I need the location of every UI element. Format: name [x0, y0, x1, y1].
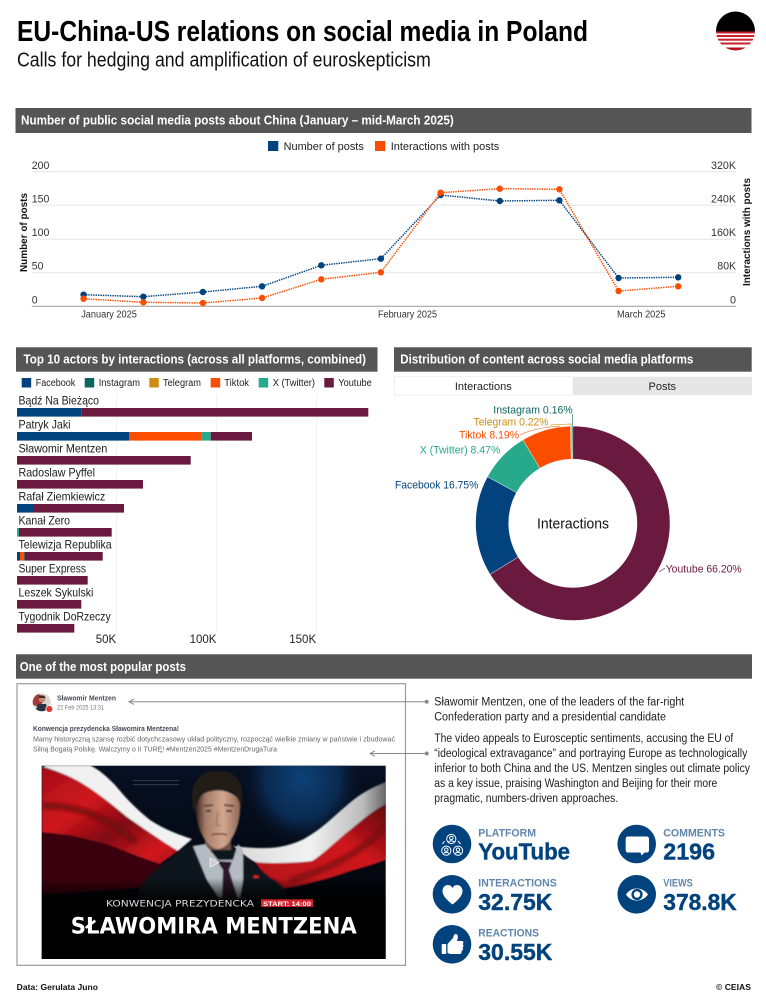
slice labels: Telegram 0.22% [474, 417, 549, 429]
heading: top 10 actors [16, 347, 378, 372]
left axis ticks: 150 [32, 194, 49, 206]
left axis title: Number of posts [18, 193, 30, 272]
stat: views: VIEWS [663, 877, 693, 889]
chart legend: Interactions with posts [391, 141, 500, 153]
avatar [31, 693, 53, 712]
right axis ticks: 240K [711, 194, 737, 206]
annotation: video: The video appeals to Eurosceptic sentiments, accusing the EU of [434, 733, 734, 745]
left axis ticks: 0 [32, 295, 38, 307]
stat: platform [433, 825, 570, 864]
heading: top 10 actors: Top 10 actors by interactions (across all platforms, combined) [24, 352, 366, 366]
annotation: video: as a key issue, praising Washington and Beijing for their more [434, 778, 717, 790]
row: Telewizja Republika: Telewizja Republika [18, 537, 112, 551]
stat: platform: PLATFORM [478, 828, 536, 840]
row: Radoslaw Pyffel [17, 465, 143, 489]
row: Patryk Jaki [17, 417, 252, 441]
icon: speech bubble [617, 825, 656, 863]
right axis ticks [711, 160, 737, 307]
series: interactions with posts [80, 186, 681, 306]
row: Radoslaw Pyffel: Radoslaw Pyffel [18, 465, 95, 479]
stat: interactions: INTERACTIONS [478, 878, 557, 890]
row: Sławomir Mentzen [17, 441, 191, 465]
arrow: author [129, 699, 428, 704]
row: Tygodnik DoRzeczy: Tygodnik DoRzeczy [18, 609, 111, 623]
bar axis labels: 150K [289, 634, 316, 646]
flag ribbon right [232, 782, 386, 890]
author name: Sławomir Mentzen [57, 696, 116, 703]
icon: people [433, 825, 471, 863]
icon: eye [617, 875, 656, 914]
tab: posts: Posts [649, 381, 677, 393]
title: EU-China-US relations on social media in Poland [17, 16, 588, 48]
right axis ticks: 160K [711, 227, 737, 239]
icon: thumbs up [433, 925, 471, 964]
heading: platform distribution: Distribution of content across social media platforms [400, 352, 693, 366]
left axis ticks [32, 160, 49, 307]
start time badge: START: 14:00 [263, 901, 311, 908]
row: Super Express [17, 561, 88, 585]
bar legend [22, 378, 372, 389]
row: Rafał Ziemkiewicz: Rafał Ziemkiewicz [18, 489, 105, 503]
row: Kanał Zero: Kanał Zero [18, 513, 70, 527]
man [140, 770, 284, 899]
panel: posts over time [16, 108, 753, 320]
slice labels: Facebook 16.75% [395, 480, 479, 492]
annotation: video: pragmatic, numbers-driven approaches. [434, 793, 618, 805]
slice labels: Youtube 66.20% [666, 563, 742, 575]
annotation: video [434, 733, 750, 805]
row: Tygodnik DoRzeczy [17, 609, 111, 633]
post text: Konwencja prezydencka Sławomira Mentzena! [33, 726, 179, 733]
row: Leszek Sykulski: Leszek Sykulski [18, 585, 93, 599]
left axis ticks: 50 [32, 261, 44, 273]
stat: comments: COMMENTS [663, 828, 725, 840]
slice labels: Instagram 0.16% [493, 404, 573, 416]
thumbnail subtitle: KONWENCJA PREZYDENCKA [106, 900, 254, 910]
donut chart [476, 426, 670, 620]
arrow: video text [370, 751, 428, 756]
stat: reactions [433, 925, 553, 965]
stat: views [617, 875, 737, 915]
post text: Mamy historyczną szansę rozbić dotychczasowy układ polityczny, rozpocząć wielkie zmiany w państwie i zbudować [33, 736, 396, 743]
right axis ticks: 80K [717, 261, 737, 273]
heading: most popular post: One of the most popular posts [20, 659, 186, 674]
annotation: author [434, 697, 685, 724]
annotation: author: Sławomir Mentzen, one of the leaders of the far-right [434, 697, 685, 709]
left axis ticks: 100 [32, 227, 49, 239]
slice labels: Tiktok 8.19% [459, 429, 519, 441]
heading: most popular post [16, 654, 752, 679]
panel: platform distribution [394, 347, 752, 620]
video thumbnail [42, 766, 386, 959]
slice labels: X (Twitter) 8.47% [420, 445, 501, 457]
x axis labels: February 2025 [378, 310, 437, 320]
post text [33, 726, 396, 754]
footer: copyright: © CEIAS [716, 982, 751, 992]
bar legend: Telegram [163, 378, 201, 389]
stat: comments: 2196 [663, 838, 715, 864]
bar legend: X (Twitter) [273, 378, 315, 389]
stat: interactions: 32.75K [478, 889, 553, 915]
donut center label: Interactions [537, 516, 609, 532]
tab: posts [573, 377, 752, 395]
row: Super Express: Super Express [18, 561, 86, 575]
tab: interactions [394, 377, 573, 395]
panel: top 10 actors [16, 347, 378, 646]
right axis title: Interactions with posts [741, 178, 753, 286]
bar legend: Tiktok [224, 378, 250, 389]
bar legend: Youtube [338, 378, 372, 389]
series: number of posts [80, 192, 681, 300]
stat: reactions: REACTIONS [478, 928, 539, 940]
row: Bądź Na Bieżąco [17, 393, 368, 417]
right axis ticks: 320K [711, 160, 737, 172]
start time badge [261, 899, 313, 908]
heading: posts over time [16, 108, 752, 133]
play icon [210, 858, 219, 867]
bar legend: Instagram [99, 378, 140, 389]
logo [715, 11, 756, 52]
bar axis labels: 50K [96, 634, 117, 646]
row: Sławomir Mentzen: Sławomir Mentzen [18, 441, 107, 455]
x axis labels [81, 310, 666, 320]
bar axis labels: 100K [190, 634, 217, 646]
left axis ticks: 200 [32, 160, 49, 172]
row: Bądź Na Bieżąco: Bądź Na Bieżąco [18, 393, 99, 407]
stat: comments [617, 825, 725, 864]
post date: 22 Feb 2025 13:31 [57, 705, 104, 712]
panel: most popular post [16, 654, 752, 992]
x axis labels: January 2025 [81, 310, 137, 320]
bar legend: Facebook [36, 378, 76, 389]
right axis ticks: 0 [730, 295, 736, 307]
annotation: author: Confederation party and a presidential candidate [434, 712, 666, 724]
slice labels [395, 404, 742, 575]
chart legend [268, 141, 500, 153]
heading: platform distribution [394, 347, 752, 372]
stat: views: 378.8K [663, 889, 737, 915]
subtitle: Calls for hedging and amplification of euroskepticism [17, 50, 431, 72]
stat: reactions: 30.55K [478, 939, 553, 965]
flag ribbon left [42, 766, 192, 895]
row: Leszek Sykulski [17, 585, 93, 609]
footer: data source: Data: Gerulata Juno [17, 982, 98, 992]
row: Patryk Jaki: Patryk Jaki [18, 417, 70, 431]
row: Rafał Ziemkiewicz [17, 489, 124, 513]
stat: interactions [433, 875, 557, 915]
post text: Silną Bogatą Polskę. Walczymy o II TURĘ! #Mentzen2025 #MentzenDrugaTura [33, 747, 277, 754]
row: Kanał Zero [17, 513, 112, 537]
icon: heart [433, 875, 471, 914]
bar axis labels [96, 634, 316, 646]
row: Telewizja Republika [17, 537, 112, 561]
heading: posts over time: Number of public social media posts about China (January – mid-March 2025) [21, 112, 454, 127]
chart legend: Number of posts [284, 141, 364, 153]
stat: platform: YouTube [478, 838, 570, 864]
x axis labels: March 2025 [617, 310, 666, 320]
post screenshot [17, 684, 406, 965]
thumbnail title: SŁAWOMIRA MENTZENA [71, 913, 357, 939]
tab: interactions: Interactions [455, 381, 512, 393]
